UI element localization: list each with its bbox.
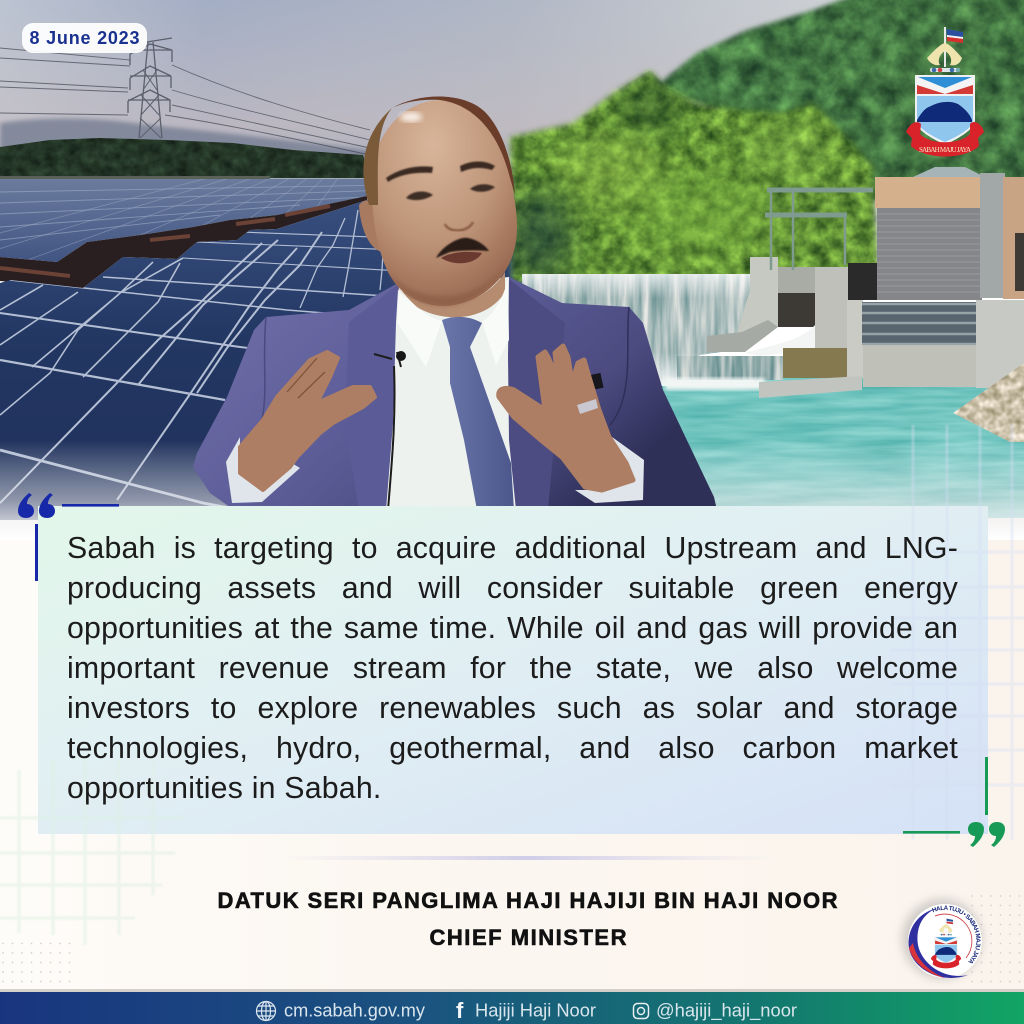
left sleeve seam (262, 317, 266, 420)
nose (445, 222, 473, 231)
quote text: producing assets and will consider suitable green energy (67, 572, 958, 605)
title heading: CHIEF MINISTER (430, 925, 627, 950)
left cuff (226, 437, 300, 503)
crest miniature (931, 918, 961, 968)
far right tan block (1003, 177, 1024, 299)
power lines (0, 48, 370, 155)
left hand finger lines (287, 358, 325, 398)
quote text: investors to explore renewables such as solar and storage (67, 692, 958, 725)
divider (280, 856, 775, 860)
right wall (976, 300, 1024, 388)
waterfall (522, 274, 752, 386)
hair left (363, 108, 392, 205)
quote text: technologies, hydro, geothermal, and also carbon market (67, 732, 958, 765)
cascade (677, 356, 783, 380)
quote text: opportunities at the same time. While oil and gas will provide an (67, 612, 958, 645)
forest tones (508, 79, 835, 280)
right hand (499, 346, 633, 490)
grey louvre wall (877, 208, 982, 300)
window (1015, 233, 1024, 291)
jaw shadow (388, 262, 508, 306)
roof (913, 167, 985, 177)
microphone head (396, 351, 406, 361)
spillway block (707, 320, 778, 352)
left collar (397, 287, 442, 367)
background: dots near badge (965, 892, 1024, 987)
rock embankment (953, 363, 1024, 442)
trash rack (862, 302, 977, 345)
background: grid lines left (0, 760, 185, 945)
badge text: HALA TUJU • SABAH MAJU JAYA (932, 906, 981, 964)
moustache (436, 238, 489, 258)
gate pier (847, 300, 863, 378)
lapel microphone (374, 352, 401, 510)
quote text: opportunities in Sabah. (67, 772, 382, 805)
dam structure (665, 167, 1024, 398)
eyes (406, 184, 495, 200)
left lapel (345, 285, 398, 510)
crescent red (909, 943, 945, 978)
right lapel (508, 279, 565, 510)
water (525, 378, 1024, 518)
pylon (128, 38, 172, 138)
solar panels: near rows (0, 190, 560, 520)
eyebrows (386, 162, 495, 182)
instagram handle: @hajiji_haji_noor (656, 1000, 797, 1022)
footer bar (0, 989, 1024, 1024)
quote panel (38, 506, 988, 834)
right column (980, 173, 1005, 298)
pocket item (588, 373, 604, 390)
distant tree line (0, 138, 370, 178)
dark gap (848, 263, 877, 300)
quote text (67, 532, 958, 805)
ring (577, 399, 598, 414)
forest (510, 70, 880, 282)
photo montage: solar farm and hydro dam (0, 0, 1024, 540)
foam (665, 378, 765, 390)
left pier (737, 257, 778, 335)
facebook name: Hajiji Haji Noor (475, 1000, 596, 1020)
gate opening (778, 267, 817, 293)
steel gantry (765, 190, 873, 215)
closing quote mark (903, 757, 1005, 847)
date badge (22, 23, 147, 53)
opening quote mark (18, 493, 119, 581)
shirt (386, 277, 516, 510)
right pier (815, 267, 848, 350)
mountain (655, 0, 1024, 200)
sky (0, 0, 1024, 200)
Sabah state crest: SABAH MAJU JAYA (919, 146, 971, 154)
background: grid lines right (890, 425, 1024, 840)
left hand (240, 352, 375, 490)
brown sill (783, 348, 847, 378)
date badge: 8 June 2023 (30, 28, 140, 48)
suit jacket (193, 277, 717, 510)
icon: facebook: f (456, 998, 464, 1023)
mouth (441, 252, 482, 263)
waterfall highlights (522, 274, 754, 386)
Sabah state crest (906, 27, 984, 156)
head (372, 100, 517, 306)
background: cream lower area (0, 500, 1024, 992)
round badge logo (898, 895, 986, 983)
solar panels: dark row gap (0, 196, 367, 288)
gate dark (778, 293, 817, 327)
icon: instagram (634, 1004, 648, 1018)
neck shadow (402, 272, 505, 317)
tie (442, 317, 514, 510)
crescent (909, 908, 968, 978)
right collar (482, 277, 509, 365)
lower wall (863, 345, 976, 387)
quote text: Sabah is targeting to acquire additional Upstream and LNG- (67, 532, 958, 565)
icon: globe (256, 1002, 276, 1020)
right sleeve seam (610, 307, 629, 425)
low haze hills (0, 119, 370, 165)
right cuff (575, 437, 644, 503)
solar panels: far rows (0, 179, 366, 262)
website: cm.sabah.gov.my (284, 1000, 425, 1020)
red ring line (935, 914, 972, 958)
apron (759, 376, 862, 398)
background: dots (0, 935, 76, 987)
upper tan band (875, 177, 983, 208)
fade to background (0, 440, 1024, 540)
hair top rim (392, 96, 515, 195)
quote text: important revenue stream for the state, we also welcome (67, 652, 958, 685)
left ear (359, 200, 384, 252)
portrait of the Chief Minister (193, 96, 717, 510)
forehead highlight (400, 112, 422, 122)
white water chute (745, 325, 815, 356)
name heading: DATUK SERI PANGLIMA HAJI HAJIJI BIN HAJI NOOR (218, 888, 838, 913)
